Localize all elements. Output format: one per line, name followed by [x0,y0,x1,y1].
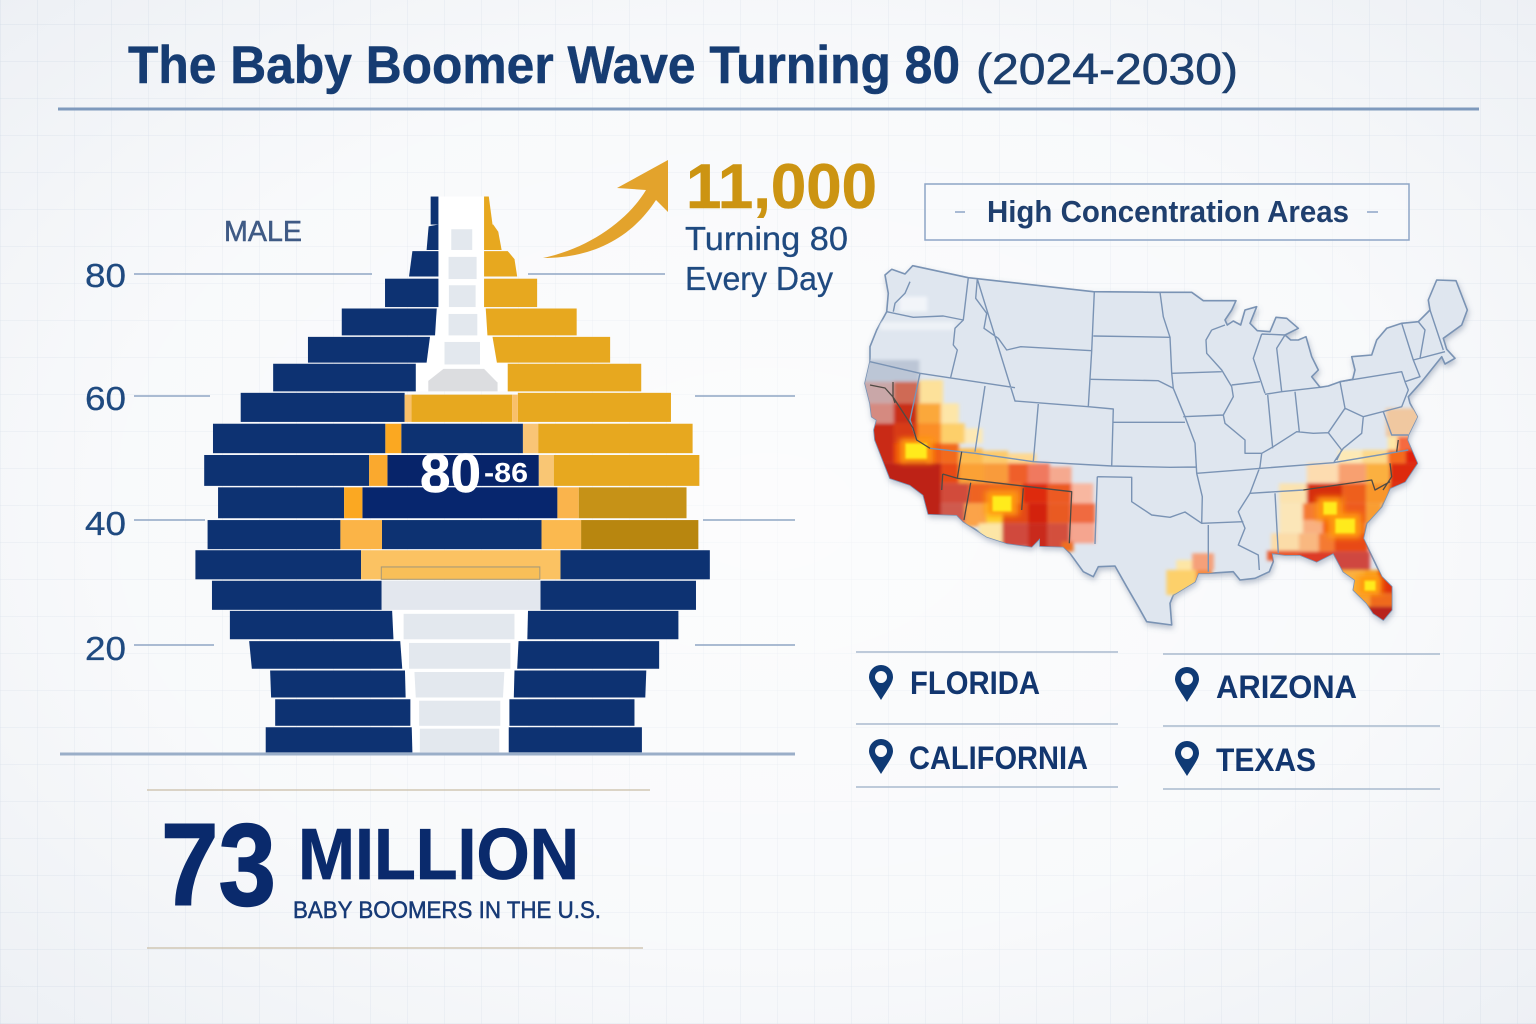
80-86 label: -86 [484,457,528,488]
callout: 11,000 turning 80 every day: 11,000 [686,152,877,222]
population pyramid chart [85,197,795,752]
age labels: 80 [85,257,126,294]
age labels: 60 [85,380,126,417]
item: Florida: FLORIDA [910,665,1040,701]
callout: 11,000 turning 80 every day [685,152,877,297]
heat overlay [860,297,1423,623]
item: Texas [1175,741,1316,778]
title: The Baby Boomer Wave Turning 80 [128,36,960,95]
hotspots [905,443,1376,591]
callout: 11,000 turning 80 every day: Turning 80 [685,220,848,257]
age labels: 40 [85,505,126,542]
hotspot glow [900,438,1382,595]
item: California: CALIFORNIA [909,740,1088,776]
title: (2024-2030) [976,45,1238,94]
state borders [870,278,1445,572]
underlay [860,423,939,463]
Southeast [1386,408,1421,437]
US heat map [860,266,1467,625]
age labels [85,257,126,667]
age labels: 20 [85,630,126,667]
gold bars right [411,197,699,549]
age axis lines [134,274,795,645]
stat: 73 million baby boomers: 73 [161,799,276,930]
centre grey blocks [404,229,514,752]
map base [865,266,1467,625]
Texas coast [1176,560,1196,570]
80-86 label [420,442,528,504]
80-86 label: 80 [420,442,481,504]
arrow: rising gold arrow [543,160,668,258]
navy bars left [195,197,438,752]
stat: 73 million baby boomers: MILLION [298,815,579,895]
male label: MALE [224,216,302,248]
heading: high concentration areas: High Concentration Areas [987,194,1349,229]
callout: 11,000 turning 80 every day: Every Day [685,260,833,297]
pyramid bars [195,197,710,752]
state list: location rows [856,652,1440,789]
heading: high concentration areas [925,184,1409,240]
item: Texas: TEXAS [1216,742,1316,778]
navy bars right and centre [362,424,710,752]
item: Arizona: ARIZONA [1216,669,1357,705]
stat: 73 million baby boomers: BABY BOOMERS IN THE U.S. [293,897,601,924]
stat: 73 million baby boomers [161,799,601,930]
light orange highlight cells [340,395,581,610]
